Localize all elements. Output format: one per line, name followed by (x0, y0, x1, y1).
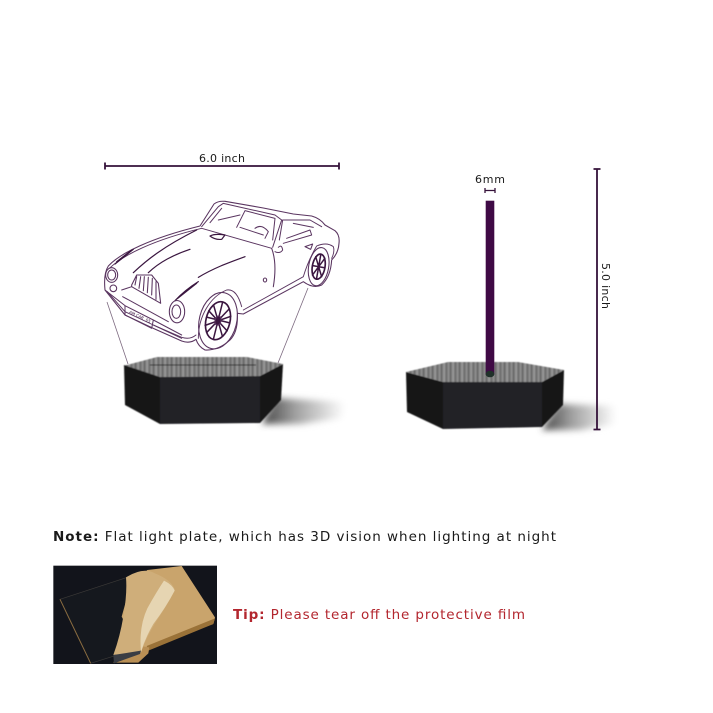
light plate support lines (107, 288, 308, 364)
car outer outline (105, 201, 339, 350)
dimension: height 5.0 inch: 5.0 inch (599, 263, 612, 309)
windshield and cabin (202, 203, 322, 253)
dimension: width 6.0 inch (105, 152, 339, 170)
car inner outline (107, 228, 334, 338)
door and body lines (263, 244, 313, 287)
acrylic plate edge (486, 201, 494, 375)
bumper and number plate (105, 287, 182, 338)
hexagonal wooden base: right lamp (406, 362, 564, 429)
photo: protective film being peeled from plate (53, 566, 217, 664)
headlights (106, 268, 185, 323)
icon: car line drawing (105, 201, 339, 353)
dimension: height 5.0 inch (594, 169, 612, 430)
icon: car line drawing: AM CAR 05 (128, 309, 152, 324)
tip text: Tip: Please tear off the protective film (233, 607, 525, 623)
dimension: thickness 6mm: 6mm (475, 173, 505, 186)
front wheel (193, 288, 243, 353)
grille (132, 275, 161, 303)
kraft film sheet (122, 566, 215, 652)
peeled film curl (113, 571, 175, 655)
dimension: thickness 6mm (475, 173, 505, 193)
illustration: side view lamp (406, 201, 616, 430)
base shadow: left lamp (262, 398, 345, 424)
hexagonal wooden base: left lamp (123, 357, 283, 424)
rear wheel (305, 246, 332, 287)
note text: Note: Flat light plate, which has 3D vision when lighting at night (53, 529, 556, 545)
hood lines (115, 230, 245, 301)
illustration: lamp with car and base (105, 201, 345, 424)
dimension: width 6.0 inch: 6.0 inch (199, 152, 245, 165)
base shadow: right lamp (542, 404, 616, 430)
clear plate (60, 577, 133, 663)
